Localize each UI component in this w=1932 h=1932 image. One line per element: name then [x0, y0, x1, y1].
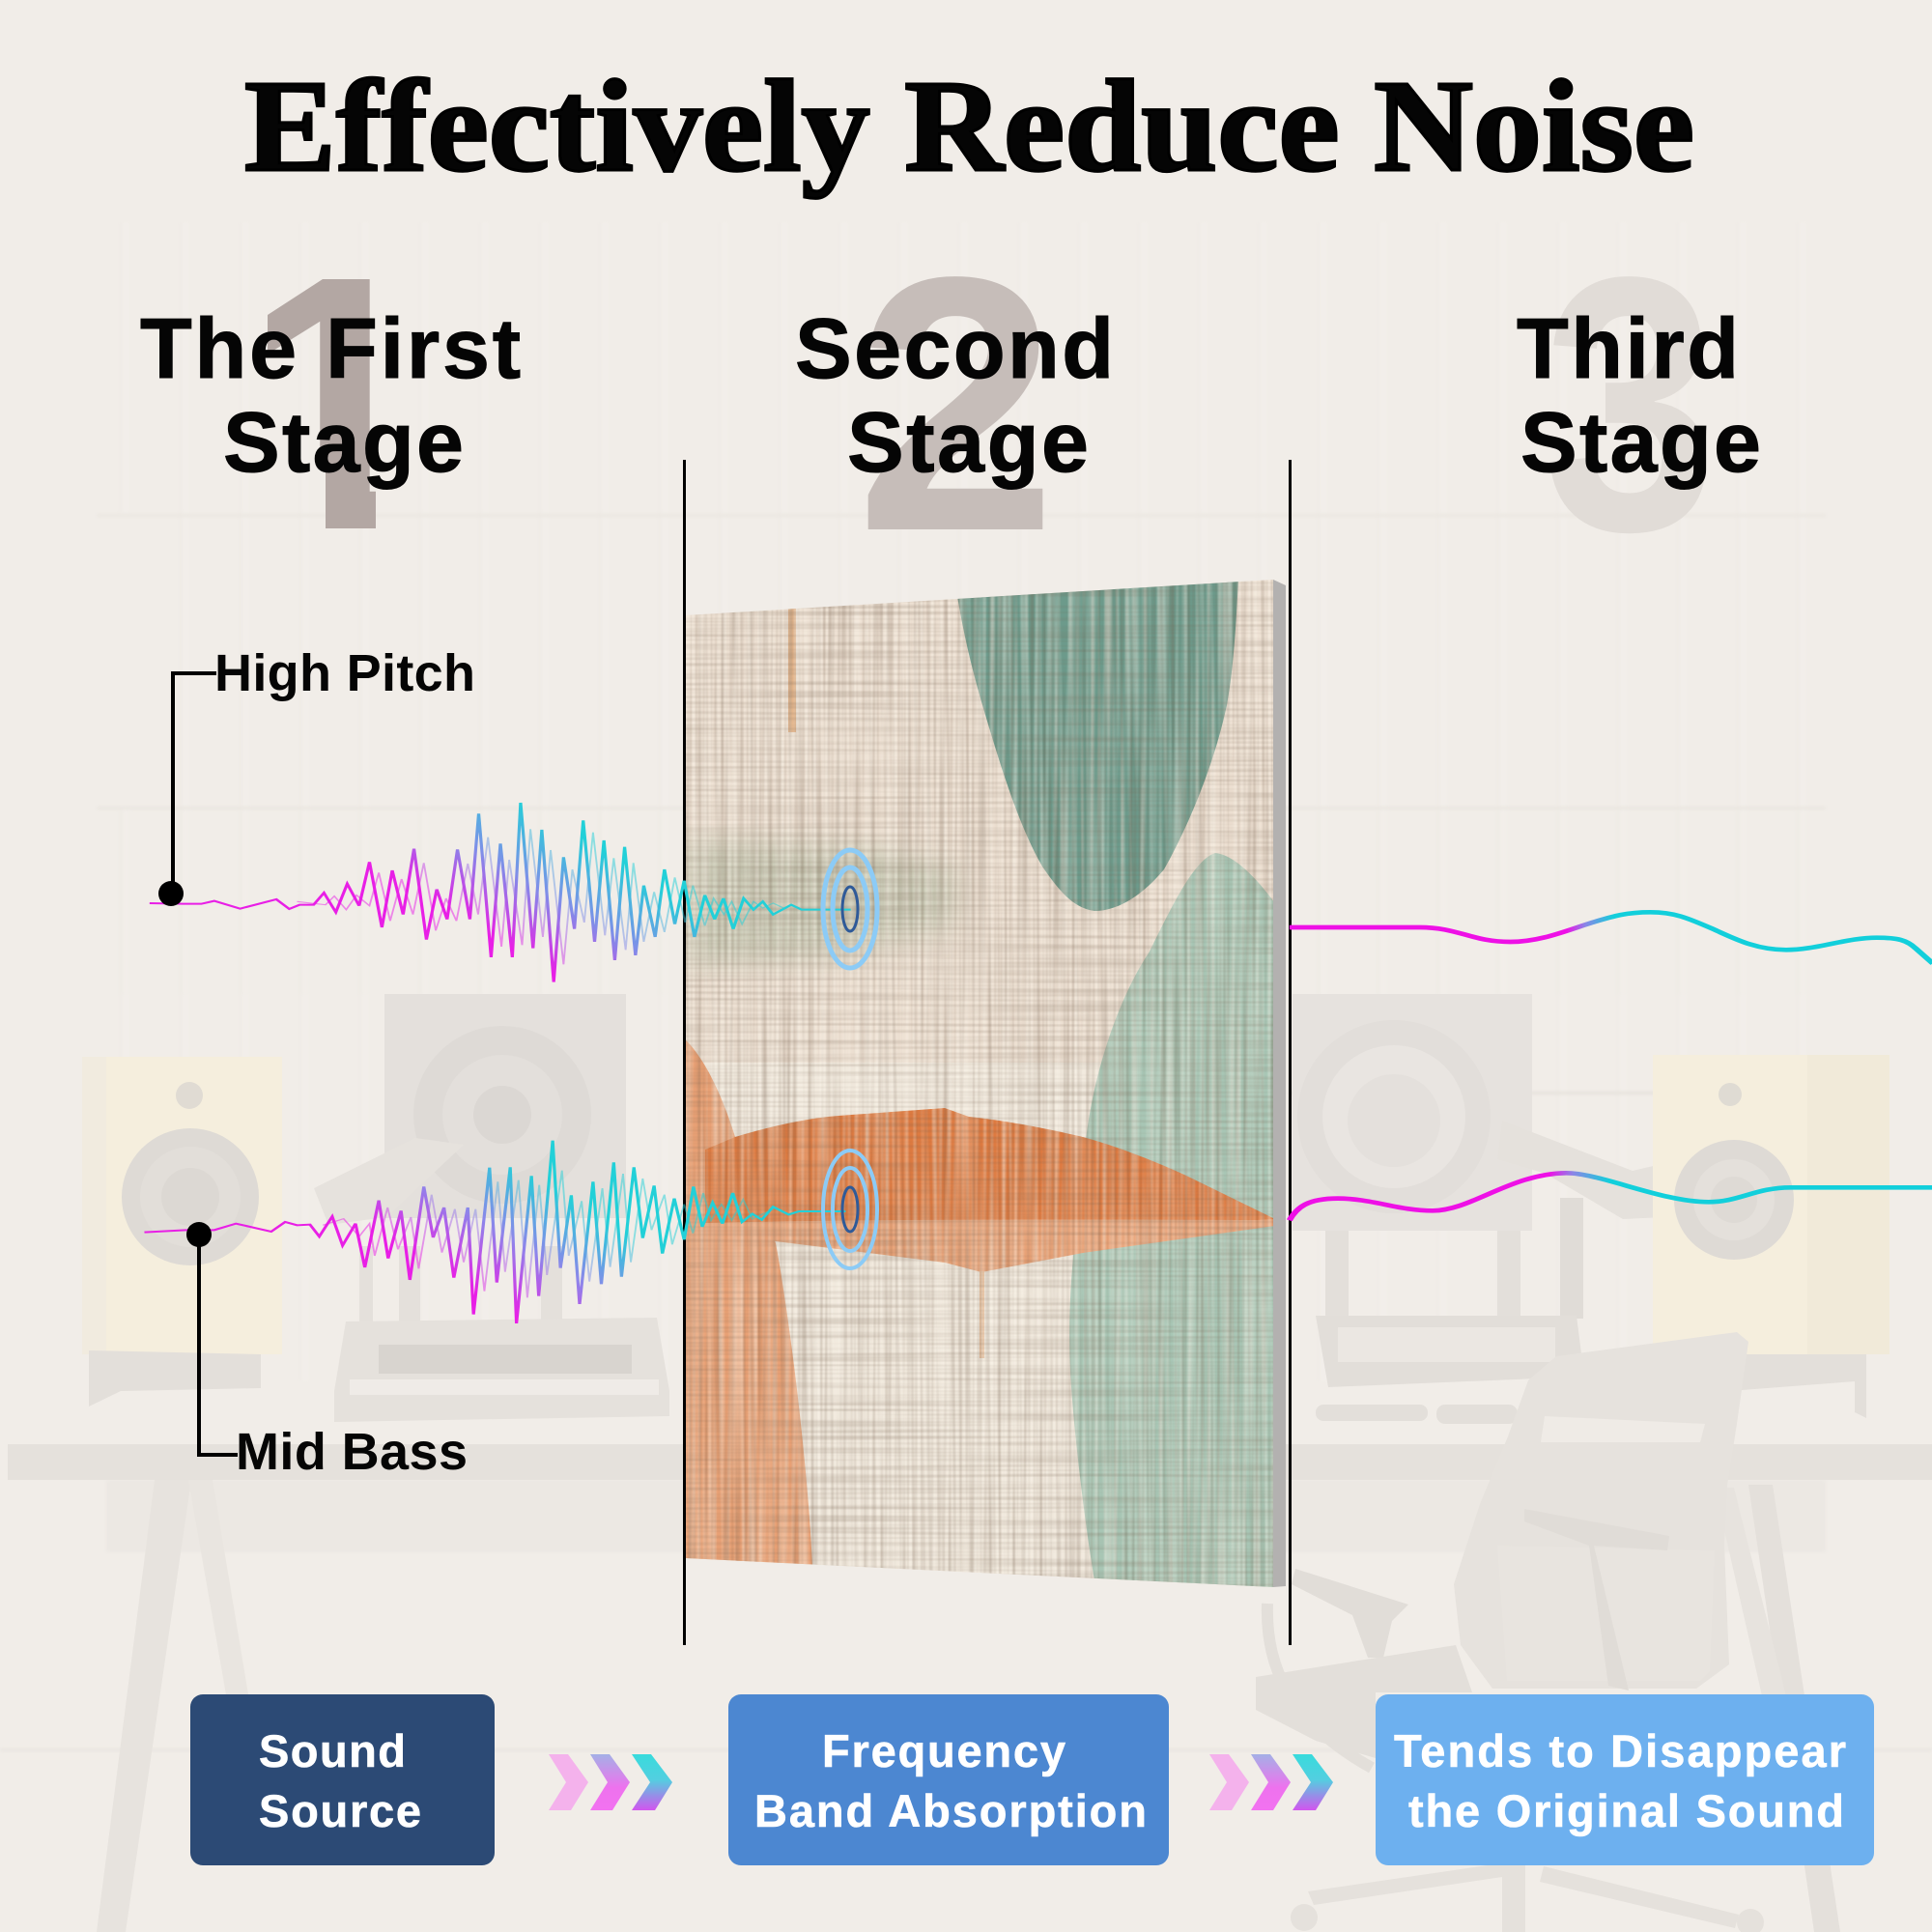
arrows: second chevrons — [1209, 1754, 1333, 1810]
step box: tends to disappear — [1376, 1694, 1874, 1865]
left keyboard — [334, 1318, 669, 1422]
fabric weave texture — [676, 570, 1285, 1594]
step box: frequency band absorption: Frequency — [822, 1725, 1065, 1776]
step box: frequency band absorption: Band Absorption — [754, 1785, 1147, 1836]
heading: second stage: Second — [795, 300, 1114, 396]
title: Effectively Reduce Noise — [244, 54, 1694, 199]
chair back — [1454, 1332, 1748, 1689]
callout: high pitch: High Pitch — [214, 644, 475, 702]
third stage residual wave: mid bass — [1290, 1173, 1932, 1220]
left grey speaker and mic arm — [314, 994, 626, 1323]
step box: tends to disappear: the Original Sound — [1408, 1785, 1844, 1836]
mid bass waveform — [144, 1141, 845, 1323]
step box: tends to disappear: Tends to Disappear — [1394, 1725, 1846, 1776]
step box: sound source: Source — [259, 1785, 421, 1836]
divider line right — [1289, 460, 1292, 1645]
chair arm — [1292, 1569, 1408, 1658]
heading: third stage: Stage — [1520, 394, 1761, 490]
heading: first stage — [140, 300, 521, 490]
acoustic panel: patterned fabric in perspective — [676, 570, 1286, 1594]
orange leaf shape: lower — [744, 1218, 1275, 1272]
stage numeral 2: 2 — [856, 203, 1057, 607]
step box: sound source: Sound — [259, 1725, 406, 1776]
heading: third stage — [1517, 300, 1761, 490]
lower drip — [980, 1271, 984, 1358]
office chair — [1256, 1332, 1764, 1932]
light teal shape — [1069, 853, 1275, 1589]
step box: frequency band absorption — [728, 1694, 1169, 1865]
step box: sound source — [190, 1694, 495, 1865]
chair seat — [1256, 1645, 1472, 1758]
right grey speaker — [1293, 994, 1663, 1319]
chair base — [1291, 1862, 1764, 1932]
right keyboard — [1316, 1316, 1584, 1424]
dark teal shape — [957, 578, 1238, 911]
acoustic wall tiles — [0, 222, 1932, 1751]
callout: mid bass — [186, 1222, 468, 1481]
heading: third stage: Third — [1517, 300, 1739, 396]
left orange shape — [684, 1038, 812, 1565]
orange leaf shape: upper — [705, 1108, 1275, 1223]
heading: second stage: Stage — [847, 394, 1089, 490]
callout: high pitch — [158, 644, 475, 906]
rings: high pitch absorption point — [823, 850, 877, 968]
table — [8, 1444, 1932, 1932]
heading: first stage: Stage — [223, 394, 464, 490]
callout: mid bass: Mid Bass — [236, 1423, 468, 1481]
top drip — [788, 609, 796, 732]
stage numeral 3: 3 — [1543, 203, 1718, 607]
green smudge behind top wave — [686, 838, 956, 966]
high pitch waveform — [150, 803, 851, 982]
rings: mid bass absorption point — [823, 1151, 877, 1268]
third stage residual wave: high pitch — [1290, 912, 1932, 963]
heading: first stage: The First — [140, 300, 521, 396]
right yellow speaker — [1653, 1055, 1889, 1418]
heading: second stage — [795, 300, 1114, 490]
stage numeral 1: 1 — [236, 202, 437, 606]
divider line left — [683, 460, 686, 1645]
arrows: first chevrons — [549, 1754, 672, 1810]
panel side edge — [1273, 580, 1286, 1587]
left yellow speaker — [82, 1057, 282, 1406]
